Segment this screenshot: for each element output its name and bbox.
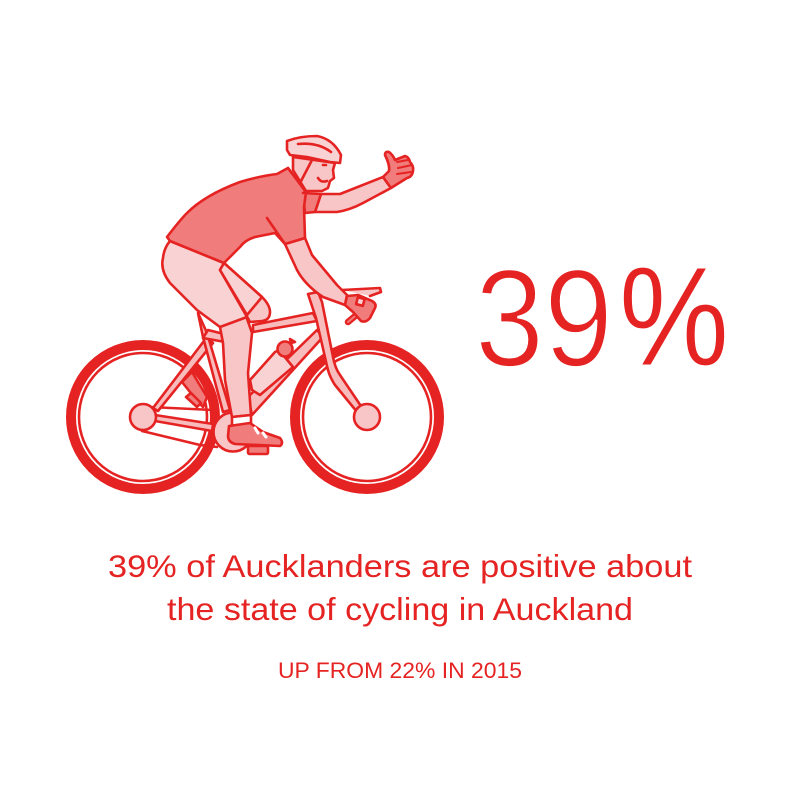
bicycle frame	[153, 292, 367, 431]
near thigh knee	[220, 263, 270, 322]
head	[293, 157, 335, 191]
helmet	[287, 136, 341, 163]
far leg shoe and pedal	[182, 372, 207, 407]
subtext: UP FROM 22% IN 2015	[278, 658, 522, 683]
raised arm	[315, 177, 391, 212]
jersey	[167, 168, 306, 263]
hand on handlebar	[345, 295, 376, 322]
headline statement: 39% of Aucklanders are positive about	[108, 548, 692, 584]
lower leg	[220, 313, 252, 417]
rear wheel	[71, 345, 215, 489]
jersey sleeve	[303, 193, 321, 213]
illustration: cyclist on bicycle	[71, 136, 439, 489]
wheel hubs	[130, 404, 380, 430]
big percentage: %	[619, 237, 729, 395]
lower arm	[285, 238, 347, 305]
sock	[232, 415, 251, 426]
pedal	[248, 446, 268, 454]
headline statement: the state of cycling in Auckland	[167, 591, 633, 627]
thumbs up hand	[383, 152, 413, 188]
big percentage	[475, 237, 729, 396]
chainring	[214, 412, 252, 452]
shorts	[162, 241, 247, 327]
headline statement	[108, 548, 692, 627]
water bottle	[250, 339, 295, 395]
handlebar and brake lever	[342, 288, 381, 322]
big percentage: 39	[475, 241, 613, 396]
shoe	[228, 423, 282, 446]
chain	[142, 407, 217, 447]
front wheel	[295, 345, 439, 489]
